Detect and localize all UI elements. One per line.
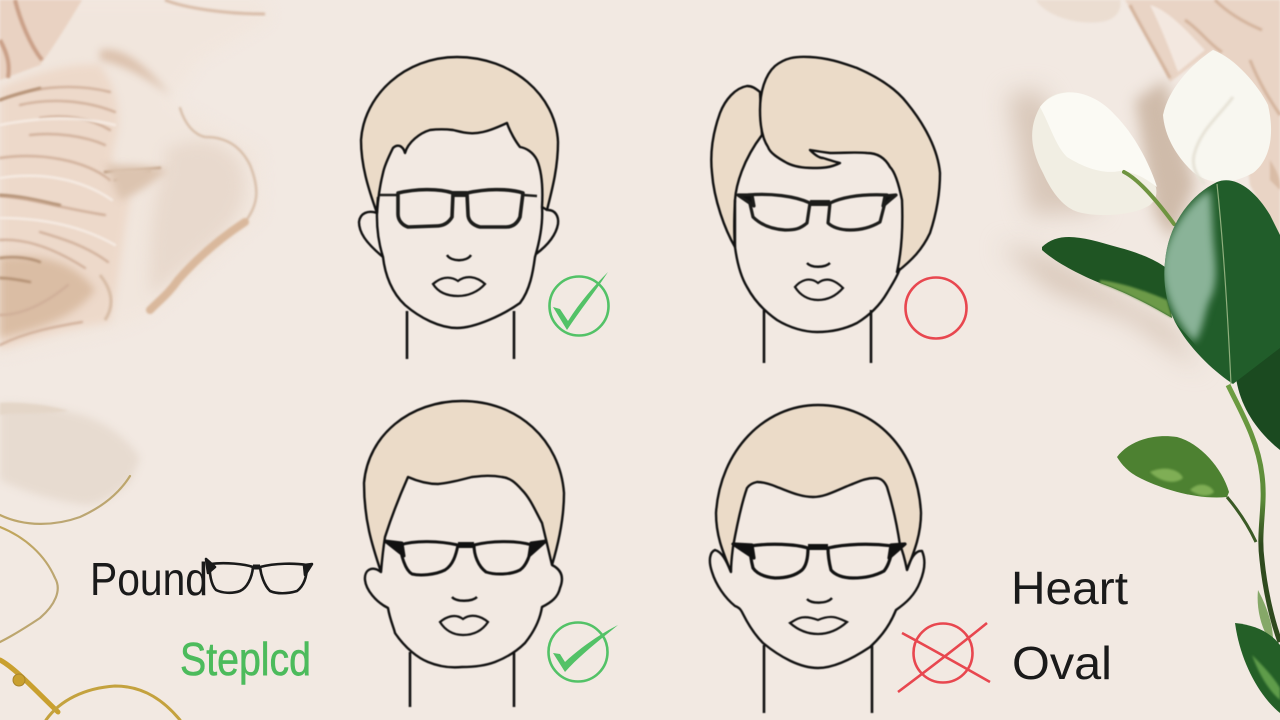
face 2: heart face with swept hair <box>711 57 940 363</box>
neck <box>410 652 514 707</box>
nose <box>447 255 471 260</box>
lips <box>790 617 847 634</box>
ears and jaw <box>710 550 924 668</box>
decoration: lace fabric top right <box>1125 0 1280 240</box>
label: Heart: Heart <box>1011 562 1128 614</box>
icon: small glasses <box>206 559 312 593</box>
glasses <box>733 544 905 578</box>
decoration: shadows under petals and leaves <box>1000 80 1200 370</box>
glasses <box>385 541 546 575</box>
decoration: left white petal <box>1032 92 1157 215</box>
decoration: big green leaf <box>1162 180 1280 384</box>
back hair <box>711 86 762 247</box>
left ear and jaw <box>365 565 562 667</box>
decoration: white cloth lower left <box>0 403 140 505</box>
hair <box>364 401 564 572</box>
label: Pound: Pound <box>90 553 208 605</box>
decoration: branch <box>1228 385 1280 642</box>
icon: green check in circle <box>550 272 608 336</box>
left ear <box>359 212 383 257</box>
lips <box>795 280 843 300</box>
nose <box>807 263 830 267</box>
neck <box>764 310 871 363</box>
face 4: oval face with crossed circle <box>710 405 924 713</box>
face 1: round face with green check <box>359 57 558 359</box>
nose <box>452 597 477 601</box>
lips <box>433 277 485 296</box>
decoration: beige yarn tassels <box>0 0 270 355</box>
decoration: lower green leaf <box>1117 436 1229 497</box>
decoration: right white petal <box>1163 50 1271 184</box>
swept hair <box>760 57 940 272</box>
icon: red circle <box>906 278 966 338</box>
label: Stepled: Steplcd <box>180 633 311 685</box>
decoration: narrow green leaf <box>1042 237 1172 318</box>
decoration: twig <box>1227 497 1256 542</box>
label: Oval: Oval <box>1012 637 1112 689</box>
neck <box>407 311 514 359</box>
decoration: bottom right leaves <box>1235 590 1280 713</box>
glasses <box>738 194 896 230</box>
decoration: stone top right <box>1036 0 1120 23</box>
right ear <box>536 210 558 254</box>
icon: green check in circle <box>548 622 618 682</box>
nose <box>807 598 832 603</box>
face outline <box>734 200 900 332</box>
decoration: petal stem <box>1124 172 1174 224</box>
neck <box>764 645 872 713</box>
face 3: square face with green check <box>364 401 564 707</box>
decoration: gold glasses chain <box>0 476 180 720</box>
hair <box>716 405 921 572</box>
decoration: dark leaf behind branch <box>1236 345 1280 450</box>
lips <box>440 616 488 635</box>
icon: red crossed circle <box>898 623 990 692</box>
hair <box>361 57 558 213</box>
face outline <box>377 197 542 328</box>
glasses <box>380 190 537 227</box>
